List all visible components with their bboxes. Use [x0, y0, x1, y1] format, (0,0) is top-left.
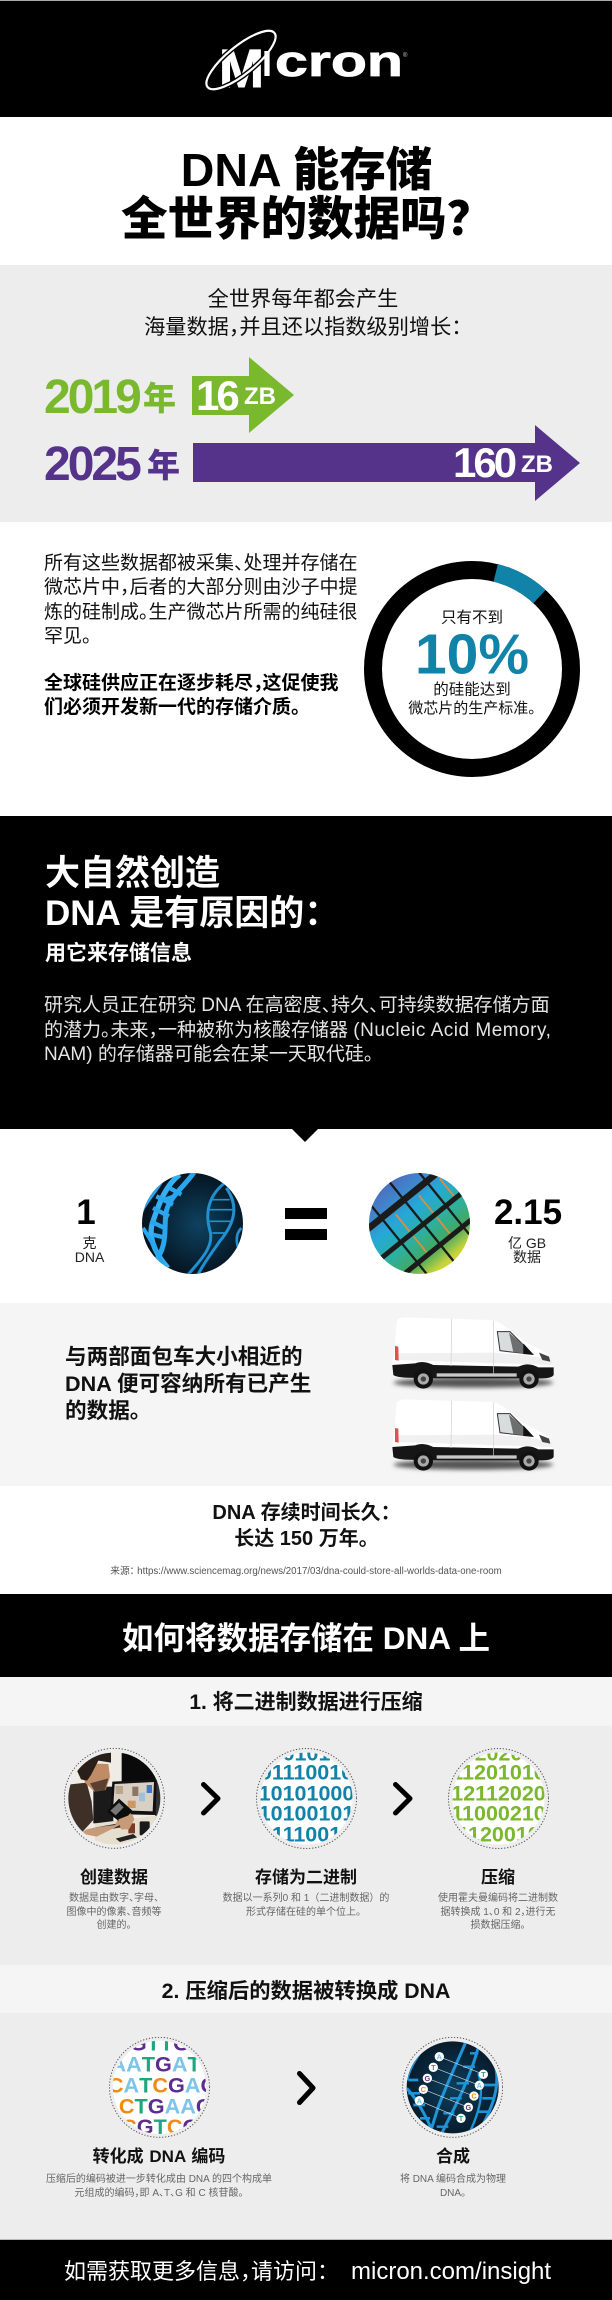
- image: DNA base pairs: A: [477, 2081, 483, 2090]
- pointer: [292, 1129, 318, 1142]
- text: two vans: DNA 便可容纳所有已产生: [65, 1370, 311, 1396]
- source: 来源： https://www.sciencemag.org/news/2017/03/dna-could-store-all-worlds-data-one-room: [110, 1566, 502, 1577]
- row: 2025: 160: [453, 439, 516, 486]
- description: 压缩后的编码被进一步转化成由 DNA 的四个构成单: [46, 2174, 272, 2185]
- text: durability: [212, 1502, 391, 1550]
- chart: 10% donut: 10%: [415, 622, 529, 686]
- image: DNA base pairs: C: [421, 2085, 427, 2094]
- heading: step 1: 1. 将二进制数据进行压缩: [189, 1691, 423, 1714]
- image: binary digits: 10100101: [259, 1802, 354, 1826]
- image: DNA base pairs: G: [424, 2074, 430, 2083]
- stat: 1 gram DNA: 克: [82, 1235, 96, 1251]
- text: silicon paragraph: 炼的硅制成。生产微芯片所需的纯硅很: [44, 602, 358, 623]
- logo: Micron: ®: [403, 52, 408, 59]
- chart: 10% donut: [364, 561, 580, 777]
- image: DNA base pairs: G: [465, 2103, 471, 2112]
- panel: data growth: [0, 265, 612, 522]
- step: create data: [64, 1748, 165, 1931]
- row: 2019: 16: [196, 372, 238, 419]
- image: DNA letters: CTGAAG: [118, 2093, 210, 2118]
- image: DNA base pairs: [402, 2037, 503, 2138]
- equals sign: [285, 1208, 327, 1240]
- text: intro: 全世界每年都会产生: [208, 288, 398, 311]
- description: 使用霍夫曼编码将二进制数: [438, 1893, 558, 1904]
- step: synthesis: [400, 2037, 506, 2199]
- step: binary: [223, 1748, 389, 1918]
- heading: step 2: [0, 1965, 612, 2013]
- text: silicon paragraph: 微芯片中，后者的大部分则由沙子中提: [44, 577, 358, 598]
- text: two vans: 与两部面包车大小相近的: [65, 1344, 303, 1368]
- label: 合成: [436, 2147, 470, 2166]
- icon: van 1: [392, 1318, 555, 1391]
- text: intro: [144, 288, 462, 339]
- image: DNA base pairs: C: [471, 2092, 477, 2101]
- chart: 10% donut: 只有不到: [441, 608, 503, 626]
- step: DNA code: [46, 2037, 272, 2199]
- text: research paragraph: [44, 994, 551, 1065]
- image: binary digits: 111001: [272, 1822, 341, 1846]
- description: [66, 1892, 162, 1931]
- logo: Micron: I: [262, 43, 272, 84]
- description: 数据以一系列0 和 1（二进制数据）的: [223, 1893, 389, 1904]
- arrow: chevron 1: [201, 1782, 220, 1816]
- image: binary digits: [256, 1748, 357, 1849]
- stat: 1 gram DNA: [75, 1193, 104, 1265]
- heading: [45, 854, 322, 933]
- text: two vans: [65, 1344, 311, 1422]
- chart: 10% donut: 微芯片的生产标准。: [408, 700, 536, 717]
- description: [438, 1892, 558, 1931]
- description: [400, 2173, 506, 2199]
- heading: DNA 是有原因的：: [45, 894, 322, 933]
- text: silicon paragraph: 所有这些数据都被采集、处理并存储在: [44, 553, 358, 574]
- text: research paragraph: 的潜力。未来，一种被称为核酸存储器 (Nucleic Acid Memory,: [44, 1020, 551, 1040]
- panel: equation: [76, 1173, 562, 1274]
- footer text: micron.com/insight: [351, 2258, 551, 2285]
- description: 据转换成 1、0 和 2，进行无: [440, 1906, 556, 1918]
- footer text: 如需获取更多信息，请访问：: [64, 2259, 328, 2284]
- heading: step 1: [0, 1677, 612, 1726]
- stat: 2.15 billion GB: 亿 GB: [508, 1235, 546, 1251]
- image: binary digits: 01110010: [260, 1760, 353, 1784]
- footer: [0, 2239, 612, 2300]
- panel: durability: [0, 1486, 612, 1594]
- text: silicon paragraph: [44, 552, 358, 647]
- row: 2025: [44, 425, 580, 501]
- heading: 大自然创造: [45, 854, 220, 893]
- chart: 10% donut: 的硅能达到: [433, 680, 511, 698]
- text: silicon paragraph: 罕见。: [44, 626, 92, 647]
- image: DNA letters: [109, 2037, 210, 2138]
- stat: 2.15 billion GB: [494, 1193, 562, 1265]
- description: 将 DNA 编码合成为物理: [400, 2174, 506, 2185]
- title: DNA 能存储: [181, 144, 432, 196]
- text: silicon bold callout: 们必须开发新一代的存储介质。: [44, 697, 301, 718]
- title: 全世界的数据吗？: [121, 193, 470, 245]
- row: 2025: 2025: [44, 438, 141, 491]
- panel: vans: [0, 1303, 612, 1486]
- text: research paragraph: NAM) 的存储器可能会在某一天取代硅。: [44, 1044, 373, 1065]
- heading: how to store: [0, 1594, 612, 1677]
- logo: Micron: cron: [275, 38, 403, 86]
- row: 2025: 年: [147, 447, 180, 484]
- text: intro: 海量数据，并且还以指数级别增长：: [144, 316, 462, 339]
- stat: 1 gram DNA: 1: [76, 1193, 96, 1232]
- label: 转化成 DNA 编码: [93, 2147, 225, 2166]
- image: DNA base pairs: T: [459, 2114, 464, 2123]
- step: compress: [438, 1748, 558, 1931]
- description: 元组成的编码，即 A、T、G 和 C 核苷酸。: [75, 2188, 243, 2199]
- stat: 2.15 billion GB: 数据: [513, 1249, 541, 1265]
- description: 数据是由数字、字母、: [69, 1893, 159, 1904]
- panel: header: [0, 0, 612, 117]
- label: 压缩: [481, 1868, 515, 1887]
- arrow: chevron 2: [393, 1782, 412, 1816]
- icon: van 2: [392, 1400, 555, 1473]
- logo: Micron: [205, 30, 408, 95]
- label: 存储为二进制: [255, 1868, 357, 1887]
- stat: 2.15 billion GB: 2.15: [494, 1193, 562, 1232]
- text: durability: 长达 150 万年。: [234, 1528, 369, 1550]
- arrow: chevron 3: [297, 2071, 316, 2105]
- text: durability: DNA 存续时间长久：: [212, 1502, 391, 1524]
- image: person with camera: [64, 1748, 165, 1849]
- text: silicon bold callout: 全球硅供应正在逐步耗尽，这促使我: [44, 673, 339, 694]
- description: [46, 2173, 272, 2199]
- image: compressed digits: 11000210: [451, 1802, 545, 1826]
- image: memory chip wafer: [369, 1173, 470, 1274]
- subheading: 用它来存储信息: [45, 942, 192, 965]
- row: 2019: 2019: [44, 371, 140, 424]
- row: 2025: ZB: [521, 451, 553, 478]
- description: 形式存储在硅的单个位上。: [246, 1906, 366, 1918]
- image: DNA base pairs: A: [437, 2052, 443, 2061]
- image: compressed digits: 12112020: [451, 1782, 545, 1806]
- row: 2019: ZB: [244, 383, 276, 410]
- image: DNA base pairs: T: [481, 2070, 486, 2079]
- image: compressed digits: 1120010: [457, 1822, 539, 1846]
- text: silicon bold callout: [44, 672, 339, 718]
- description: 图像中的像素、音频等: [66, 1906, 162, 1918]
- label: 创建数据: [80, 1868, 148, 1887]
- image: DNA base pairs: A: [417, 2096, 423, 2105]
- image: DNA helix: [142, 1173, 243, 1274]
- description: 损数据压缩。: [470, 1920, 526, 1931]
- image: DNA base pairs: T: [431, 2063, 436, 2072]
- description: [223, 1892, 389, 1918]
- image: compressed digits: [448, 1748, 549, 1849]
- description: 创建的。: [96, 1920, 132, 1931]
- panel: nature: [0, 816, 612, 1129]
- chart: data growth arrows: [44, 357, 580, 501]
- image: binary digits: 10101000: [259, 1782, 354, 1806]
- panel: step 1: [0, 1726, 612, 1965]
- panel: title: [0, 117, 612, 265]
- panel: silicon: [0, 522, 612, 816]
- row: 2019: [44, 357, 294, 433]
- title: [121, 144, 470, 245]
- heading: how to store: 如何将数据存储在 DNA 上: [122, 1620, 490, 1656]
- panel: step 2: [0, 2013, 612, 2239]
- footer text: [64, 2258, 551, 2285]
- text: research paragraph: 研究人员正在研究 DNA 在高密度、持久、可持续数据存储方面: [44, 995, 550, 1016]
- image: compressed digits: 11201010: [451, 1760, 545, 1784]
- stat: 1 gram DNA: DNA: [75, 1249, 104, 1265]
- text: two vans: 的数据。: [65, 1398, 141, 1422]
- heading: step 2: 2. 压缩后的数据被转换成 DNA: [162, 1979, 450, 2003]
- row: 2019: 年: [143, 380, 176, 417]
- description: DNA。: [440, 2188, 466, 2199]
